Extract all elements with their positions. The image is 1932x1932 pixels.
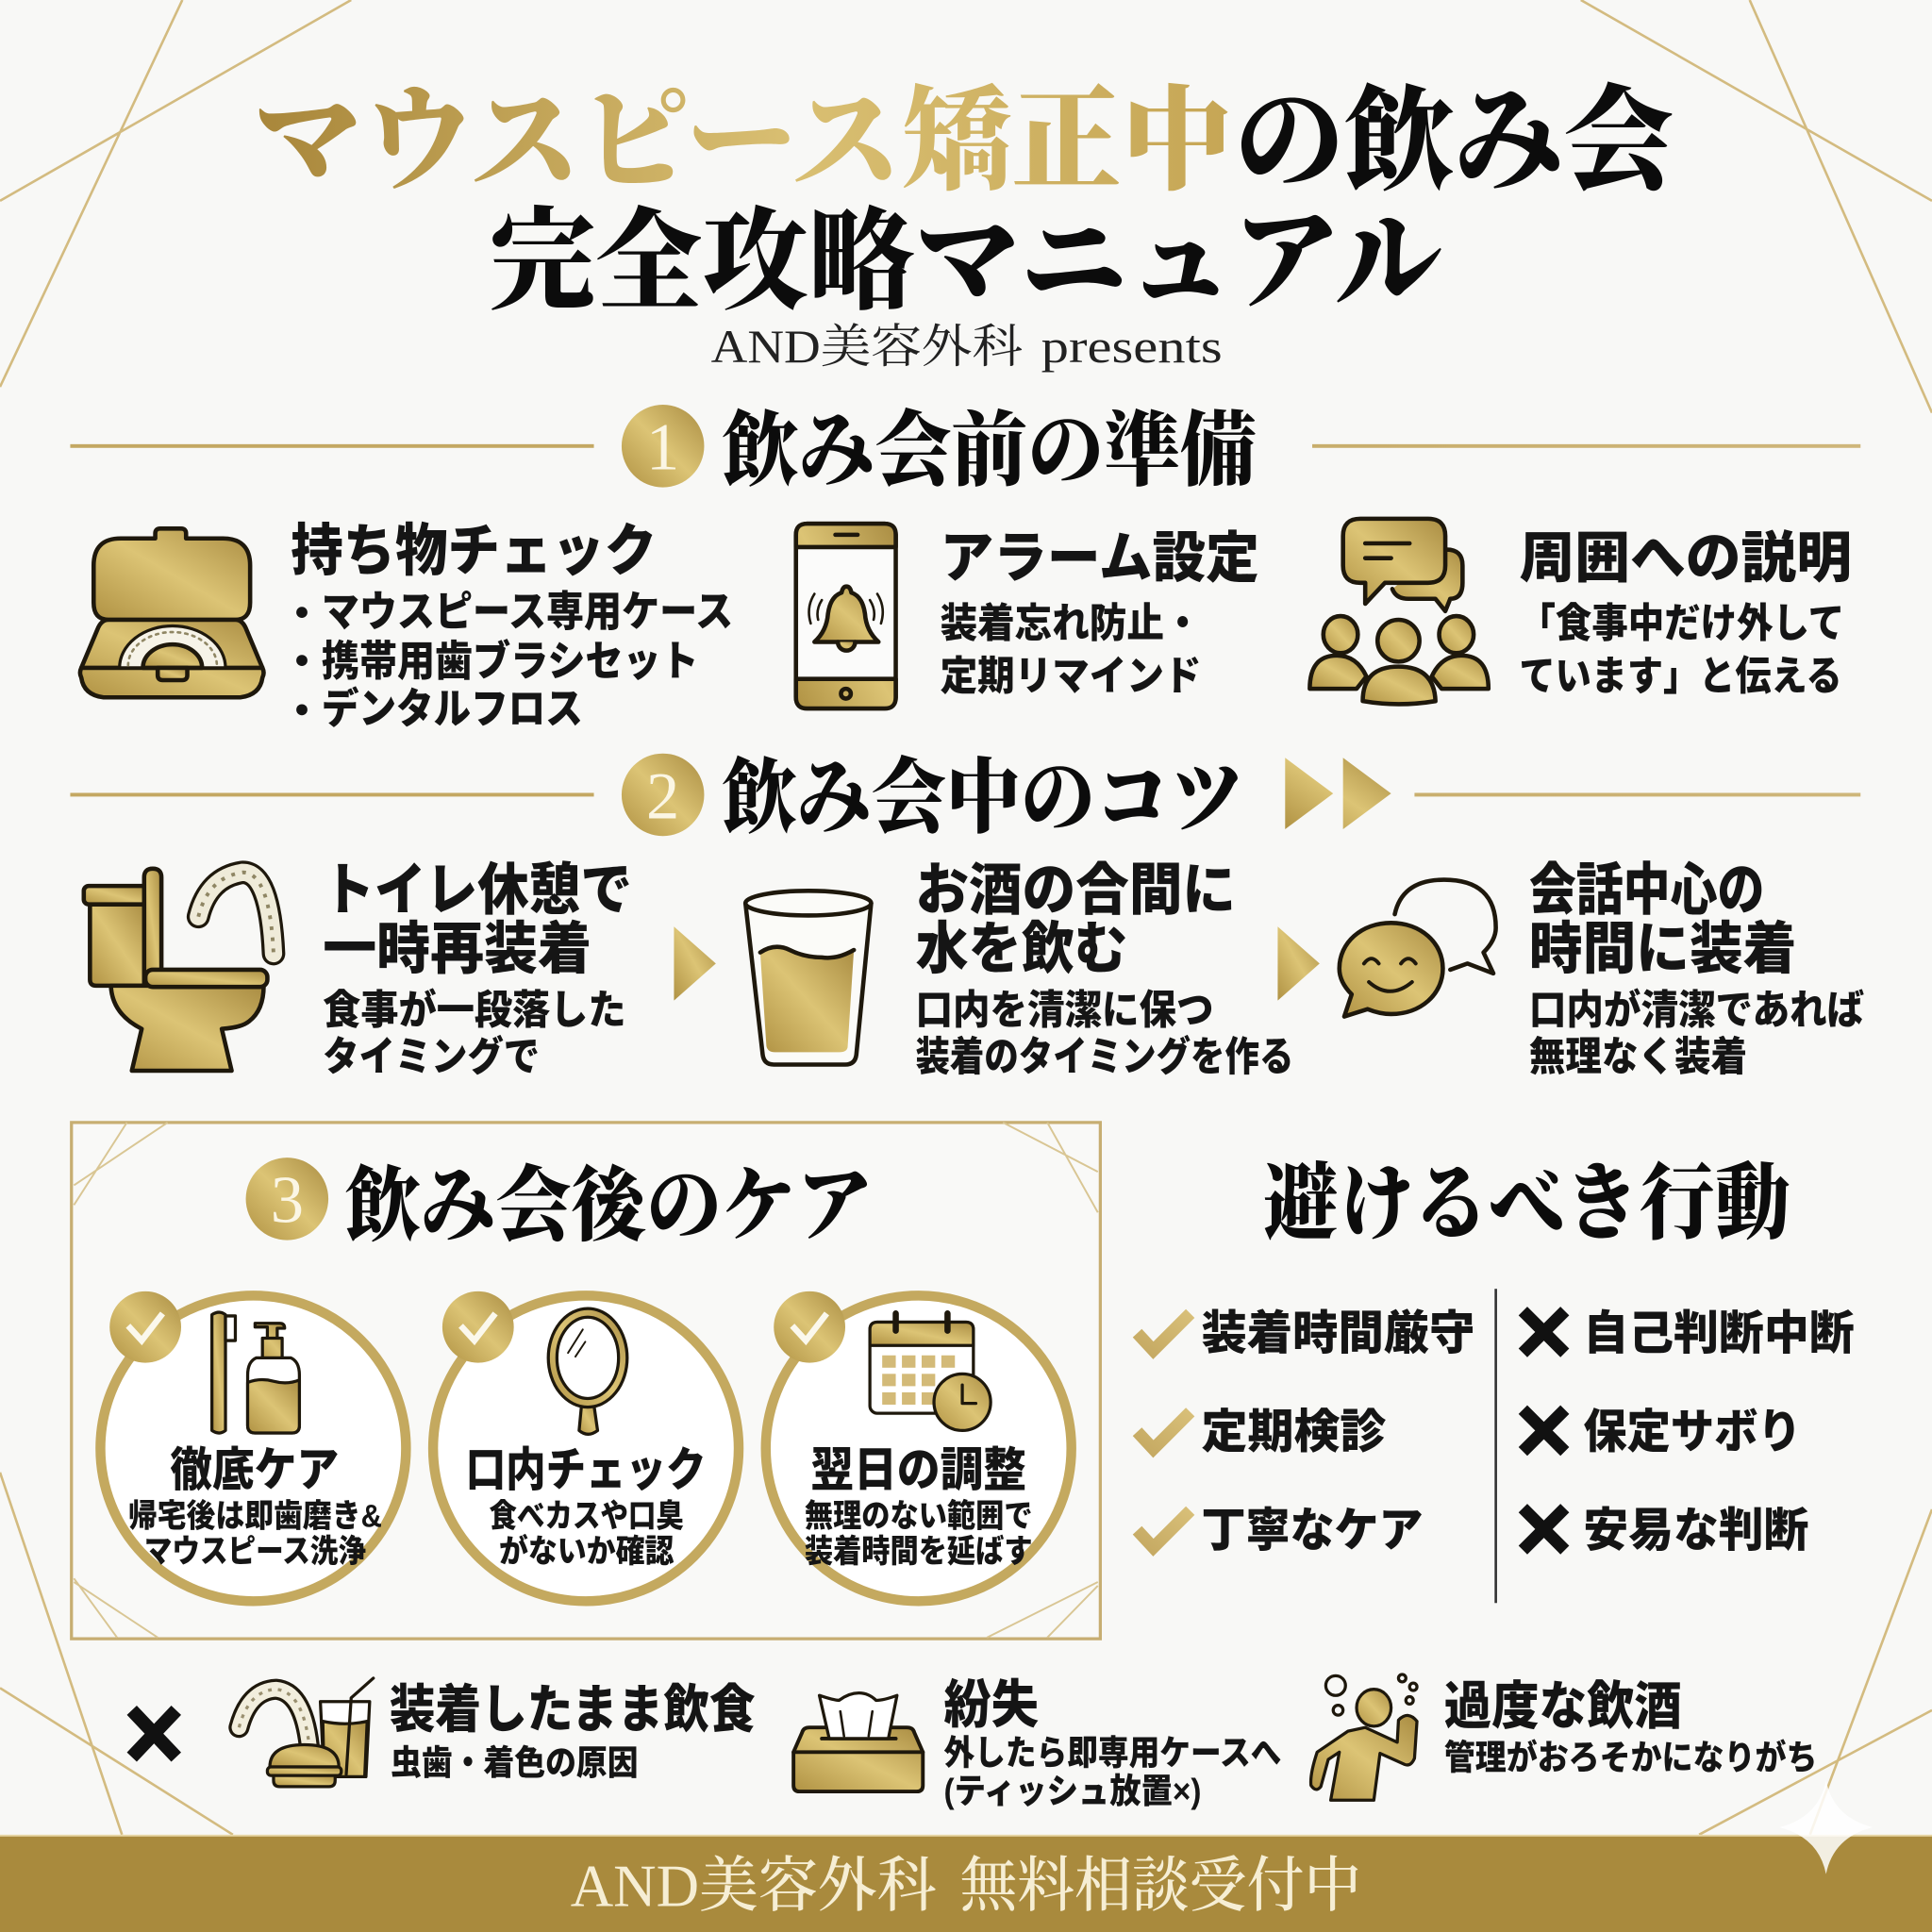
text: eating bbox=[390, 1680, 756, 1782]
text: over-drinking bbox=[1444, 1676, 1818, 1777]
text: losing bbox=[943, 1675, 1281, 1810]
icon: toilet and retainer bbox=[84, 869, 274, 1071]
card: next-day adjustment: 無理のない範囲で bbox=[805, 1498, 1033, 1534]
text: belongings: マウスピース専用ケース bbox=[322, 590, 733, 636]
text: explanation: 「食事中だけ外して bbox=[1519, 601, 1844, 646]
icon: mouthpiece case bbox=[80, 528, 264, 697]
panel: tip conversation bbox=[1340, 858, 1864, 1080]
card: thorough care: マウスピース洗浄 bbox=[144, 1534, 366, 1570]
section 2 heading: 2 bbox=[646, 759, 679, 833]
panel: prep item explanation bbox=[1309, 519, 1852, 704]
text: alarm: アラーム設定 bbox=[941, 527, 1259, 589]
panel: prep item alarm bbox=[796, 524, 1259, 708]
subtitle bbox=[711, 321, 1223, 373]
icon: retainer burger drink bbox=[239, 1678, 374, 1787]
arrow bbox=[1277, 926, 1320, 1001]
title bbox=[253, 79, 1677, 324]
card: next-day adjustment: 翌日の調整 bbox=[810, 1443, 1026, 1496]
card: thorough care bbox=[100, 1291, 406, 1601]
panel: prep item belongings bbox=[80, 520, 733, 733]
text: alarm: 定期リマインド bbox=[941, 654, 1201, 699]
divider bbox=[1494, 1289, 1497, 1603]
card: mouth check bbox=[433, 1291, 739, 1601]
text: explanation: 周囲への説明 bbox=[1519, 527, 1852, 589]
list: do: 定期検診 bbox=[1201, 1406, 1387, 1458]
panel: avoid over-drinking bbox=[1311, 1674, 1818, 1800]
list: don't bbox=[1523, 1307, 1855, 1557]
card: mouth check: 口内チェック bbox=[466, 1443, 706, 1496]
icon: smiling speech bubble bbox=[1340, 880, 1496, 1017]
text: conversation: 口内が清潔であれば bbox=[1529, 987, 1864, 1033]
text: conversation: 時間に装着 bbox=[1529, 918, 1796, 981]
footer band: 無料相談受付中 bbox=[959, 1853, 1361, 1920]
text: losing: 外したら即専用ケースへ bbox=[943, 1733, 1281, 1772]
text: water: 口内を清潔に保つ bbox=[915, 988, 1214, 1033]
icon: phone with bell bbox=[796, 524, 896, 708]
text: conversation bbox=[1529, 858, 1864, 1080]
text: belongings: 携帯用歯ブラシセット bbox=[322, 638, 699, 685]
section 2 heading bbox=[70, 753, 1860, 843]
heading: section 3: 飲み会後のケア bbox=[345, 1160, 873, 1251]
panel: avoid eating bbox=[239, 1678, 756, 1787]
text: eating: 虫歯・着色の原因 bbox=[391, 1743, 639, 1782]
icon: calendar and clock bbox=[870, 1313, 991, 1430]
text: belongings bbox=[291, 520, 733, 733]
text: over-drinking: 管理がおろそかになりがち bbox=[1444, 1739, 1818, 1777]
icon: tissue box bbox=[793, 1693, 923, 1791]
text: toilet: 一時再装着 bbox=[323, 918, 591, 981]
panel: after-care bbox=[72, 1123, 1100, 1639]
text: explanation: ています」と伝える bbox=[1519, 654, 1842, 699]
icon: glass of water bbox=[745, 891, 871, 1064]
text: water bbox=[915, 858, 1293, 1080]
list: do: 装着時間厳守 bbox=[1201, 1307, 1474, 1359]
heading: behaviours to avoid: 避けるべき行動 bbox=[1263, 1158, 1790, 1251]
arrow bbox=[674, 926, 716, 1001]
arrows bbox=[1285, 758, 1391, 829]
text: belongings: デンタルフロス bbox=[322, 686, 583, 733]
panel: tip toilet bbox=[84, 858, 632, 1080]
list: don't: 安易な判断 bbox=[1583, 1504, 1808, 1557]
card: next-day adjustment bbox=[766, 1291, 1072, 1601]
text: belongings: 持ち物チェック bbox=[291, 520, 657, 583]
text: toilet: トイレ休憩で bbox=[323, 858, 632, 922]
card: thorough care: 徹底ケア bbox=[170, 1443, 339, 1496]
section 1 heading: 1 bbox=[646, 411, 679, 485]
text: losing: (ティッシュ放置×) bbox=[943, 1772, 1201, 1810]
list: do: 丁寧なケア bbox=[1201, 1504, 1424, 1557]
text: explanation bbox=[1519, 527, 1852, 699]
text: conversation: 無理なく装着 bbox=[1529, 1035, 1747, 1080]
icon: dizzy person bbox=[1311, 1674, 1417, 1800]
text: alarm: 装着忘れ防止・ bbox=[941, 601, 1201, 646]
icon: cross bbox=[132, 1710, 176, 1757]
panel: tip water bbox=[745, 858, 1293, 1080]
text: toilet bbox=[323, 858, 632, 1080]
title: の飲み会 bbox=[1235, 79, 1677, 205]
subtitle: presents bbox=[1041, 321, 1223, 373]
card: thorough care: 帰宅後は即歯磨き& bbox=[128, 1498, 382, 1534]
title: マウスピース矯正中 bbox=[253, 79, 1232, 205]
card: next-day adjustment: 装着時間を延ばす bbox=[805, 1534, 1033, 1570]
text: water: お酒の合間に bbox=[915, 858, 1236, 922]
subtitle: AND美容外科 bbox=[711, 321, 1023, 373]
footer band bbox=[0, 1835, 1932, 1932]
icon: hand mirror bbox=[548, 1308, 627, 1434]
card: mouth check: がないか確認 bbox=[499, 1533, 675, 1570]
footer band: AND美容外科 bbox=[571, 1853, 937, 1920]
section 1 heading: 飲み会前の準備 bbox=[722, 406, 1257, 496]
title: 完全攻略マニュアル bbox=[490, 201, 1442, 324]
icon: toothbrush and bottle bbox=[212, 1312, 299, 1433]
text: toilet: タイミングで bbox=[323, 1034, 540, 1080]
panel: avoid losing bbox=[793, 1675, 1281, 1810]
text: losing: 紛失 bbox=[943, 1675, 1039, 1734]
text: alarm bbox=[941, 527, 1259, 699]
icon: speech bubbles and people bbox=[1309, 519, 1489, 704]
section 2 heading: 飲み会中のコツ bbox=[722, 753, 1244, 843]
list: don't: 自己判断中断 bbox=[1583, 1307, 1855, 1359]
text: conversation: 会話中心の bbox=[1529, 858, 1764, 922]
text: eating: 装着したまま飲食 bbox=[390, 1680, 756, 1739]
heading: section 3: 3 bbox=[271, 1164, 304, 1238]
card: mouth check: 食べカスや口臭 bbox=[490, 1498, 684, 1534]
text: water: 装着のタイミングを作る bbox=[915, 1034, 1293, 1080]
list: don't: 保定サボり bbox=[1583, 1406, 1802, 1458]
text: water: 水を飲む bbox=[915, 918, 1127, 981]
section 1 heading bbox=[70, 405, 1860, 496]
text: over-drinking: 過度な飲酒 bbox=[1444, 1676, 1682, 1735]
icon: sparkle bbox=[1779, 1780, 1873, 1874]
text: toilet: 食事が一段落した bbox=[323, 987, 626, 1033]
list: do bbox=[1138, 1307, 1474, 1557]
